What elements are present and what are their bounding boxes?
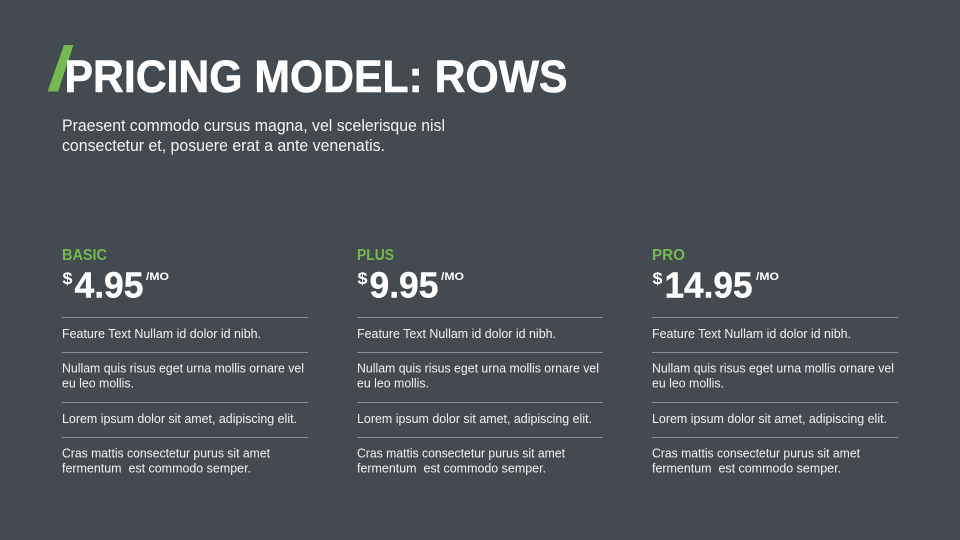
price: pro: $ xyxy=(652,269,663,288)
feature 2: Nullam quis risus eget urna mollis ornare vel xyxy=(357,360,599,376)
feature 4: Cras mattis consectetur purus sit amet xyxy=(652,446,860,460)
panel: pro plan xyxy=(652,247,898,476)
plan name: pro: PRO xyxy=(652,247,685,264)
feature 3: Lorem ipsum dolor sit amet, adipiscing elit. xyxy=(357,411,592,426)
subtitle: consectetur et, posuere erat a ante venenatis. xyxy=(62,136,385,155)
feature 2: eu leo mollis. xyxy=(62,376,134,390)
feature 2: Nullam quis risus eget urna mollis ornare vel xyxy=(62,360,304,376)
price: plus xyxy=(358,264,464,306)
price: basic xyxy=(62,264,169,306)
feature 2: eu leo mollis. xyxy=(357,376,429,390)
feature 4 xyxy=(357,446,565,476)
price: plus: 9.95 xyxy=(370,264,438,306)
feature 4 xyxy=(652,446,860,476)
feature 4: fermentum est commodo semper. xyxy=(652,460,841,476)
plan name: basic: BASIC xyxy=(62,247,107,264)
price: pro: 14.95 xyxy=(664,264,752,306)
icon: green title slash xyxy=(48,45,74,92)
price: pro: /MO xyxy=(756,271,779,283)
feature 4: fermentum est commodo semper. xyxy=(62,460,251,476)
feature 2 xyxy=(62,360,304,390)
price: plus: /MO xyxy=(441,271,464,283)
price: plus: $ xyxy=(358,269,368,288)
feature 4: Cras mattis consectetur purus sit amet xyxy=(62,446,270,460)
feature 3: Lorem ipsum dolor sit amet, adipiscing elit. xyxy=(652,411,887,426)
feature 1: Feature Text Nullam id dolor id nibh. xyxy=(652,326,851,341)
title: PRICING MODEL: ROWS xyxy=(64,51,568,102)
panel: plus plan xyxy=(357,247,603,476)
feature 4: Cras mattis consectetur purus sit amet xyxy=(357,446,565,460)
price: basic: /MO xyxy=(146,271,169,283)
feature 4 xyxy=(62,446,270,476)
feature 2: eu leo mollis. xyxy=(652,376,724,390)
feature 1: Feature Text Nullam id dolor id nibh. xyxy=(357,326,556,341)
feature 3: Lorem ipsum dolor sit amet, adipiscing elit. xyxy=(62,411,297,426)
feature 1: Feature Text Nullam id dolor id nibh. xyxy=(62,326,261,341)
subtitle: Praesent commodo cursus magna, vel scelerisque nisl xyxy=(62,116,445,135)
feature 2 xyxy=(357,360,599,390)
price: basic: 4.95 xyxy=(74,264,144,306)
feature 2: Nullam quis risus eget urna mollis ornare vel xyxy=(652,360,894,376)
feature 2 xyxy=(652,360,894,390)
price: basic: $ xyxy=(62,269,73,288)
subtitle xyxy=(62,116,445,155)
plan name: plus: PLUS xyxy=(357,247,394,264)
panel: basic plan xyxy=(62,247,308,476)
feature 4: fermentum est commodo semper. xyxy=(357,460,546,476)
